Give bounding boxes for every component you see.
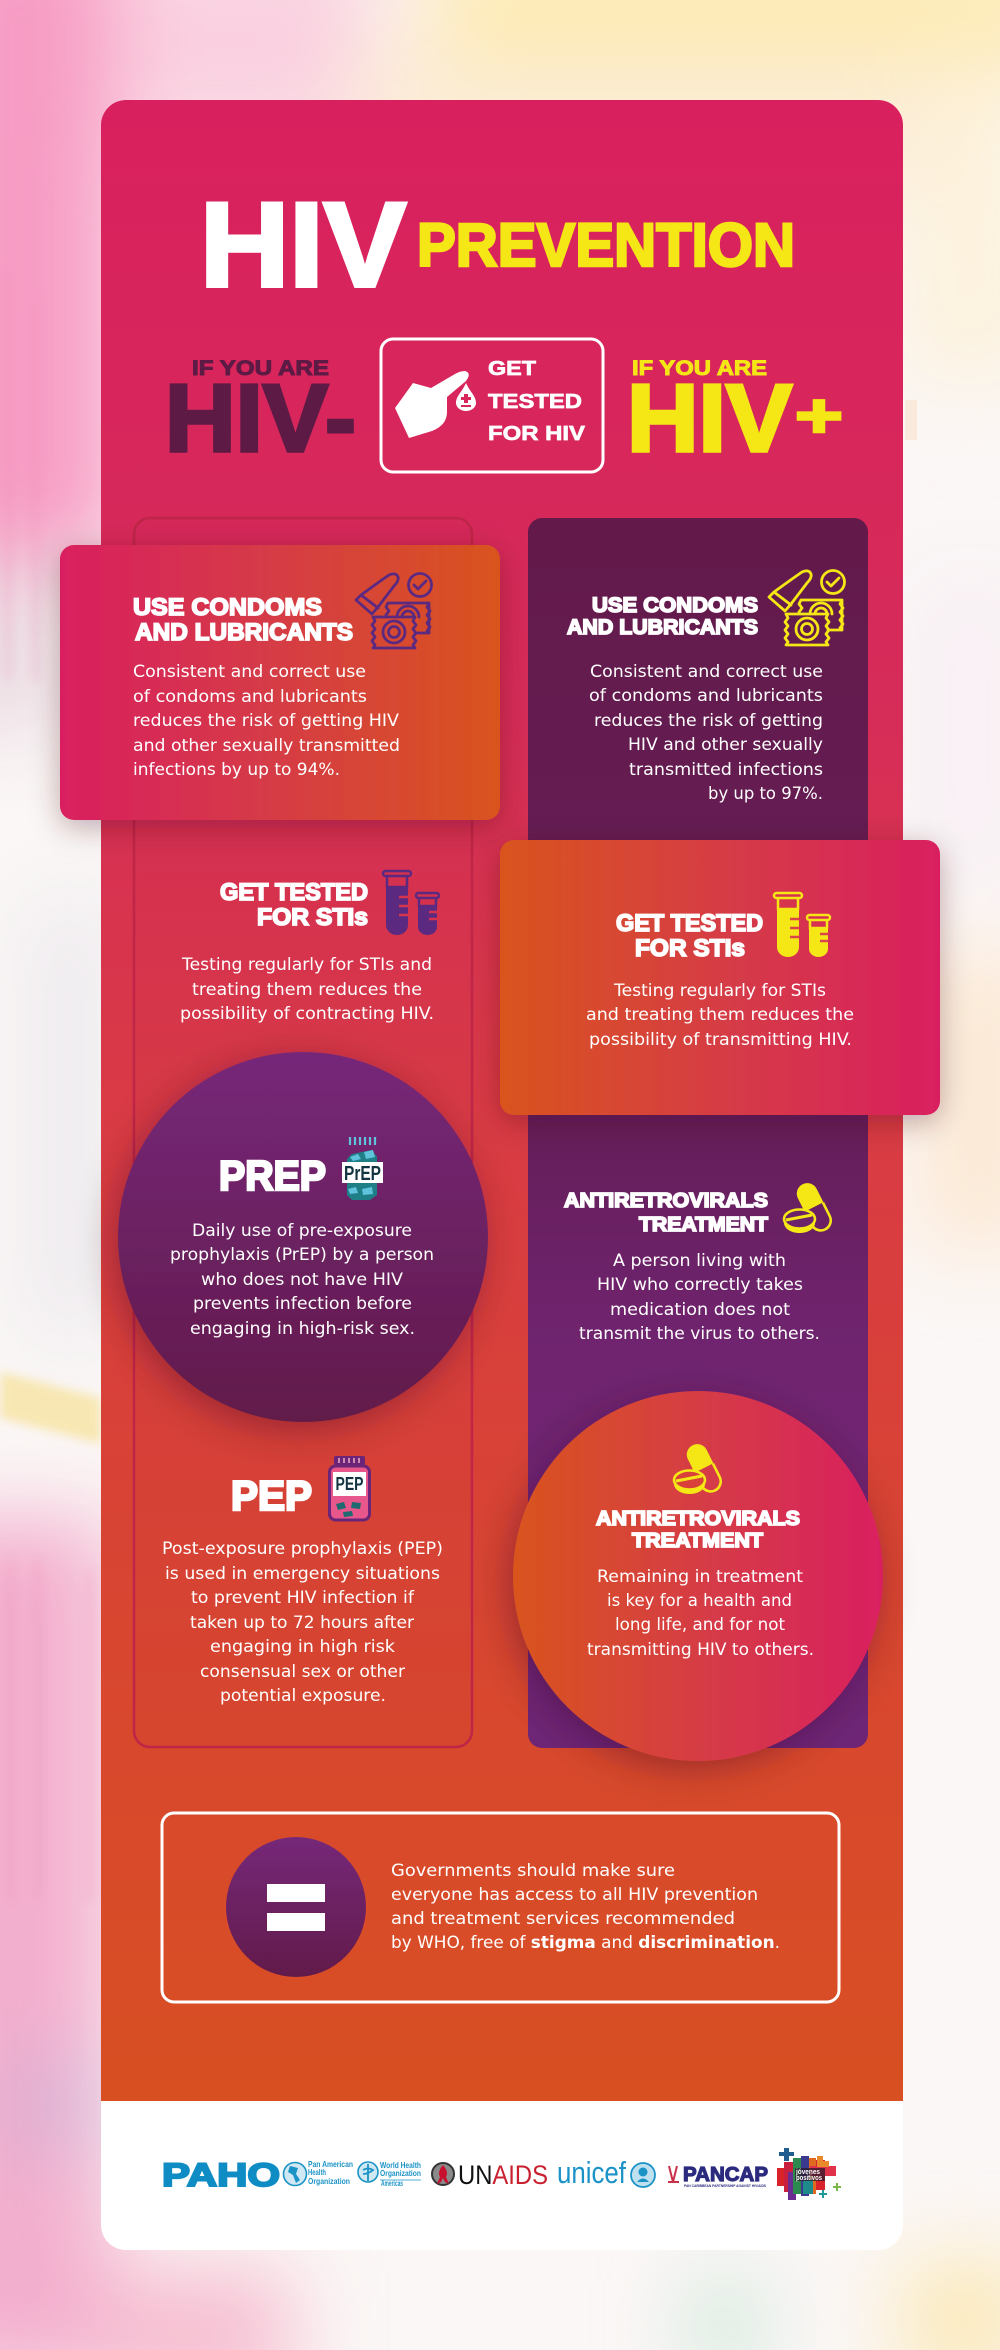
logo: Jovenes Positivos: positivos (796, 2175, 822, 2182)
panel: PEP: engaging in high risk (210, 1637, 395, 1656)
panel: PEP: to prevent HIV infection if (191, 1588, 415, 1607)
logo: PAHO: PAHO (162, 2157, 280, 2193)
panel: antiretrovirals circle: long life, and for not (615, 1615, 786, 1634)
panel: negative, use condoms: infections by up to 94%. (133, 760, 340, 779)
panel: positive, use condoms (567, 570, 844, 803)
logo: WHO: Organization (380, 2168, 421, 2178)
logo: PANCAP: PANCAP (683, 2164, 768, 2186)
panel: negative, use condoms: Consistent and correct use (133, 662, 366, 681)
get tested box: TESTED (488, 391, 582, 413)
heading: if you are HIV negative: - (323, 348, 358, 485)
panel: antiretrovirals circle: TREATMENT (632, 1529, 763, 1552)
callout: governments: everyone has access to all HIV prevention (391, 1885, 758, 1904)
heading: if you are HIV positive: HIV (627, 365, 792, 472)
panel: negative, use condoms: reduces the risk of getting HIV (133, 711, 400, 730)
callout: governments: Governments should make sure (391, 1861, 675, 1880)
callout: governments: by WHO, free of stigma and discrimination. (391, 1933, 780, 1952)
logo: PAHO (162, 2157, 353, 2193)
panel: antiretrovirals circle: is key for a health and (607, 1591, 792, 1610)
panel: positive, use condoms: of condoms and lubricants (589, 686, 823, 705)
logo: WHO (358, 2160, 421, 2188)
panel: positive, use condoms: by up to 97%. (708, 784, 823, 803)
callout: governments (162, 1813, 839, 2002)
logo: PAHO: Organization (308, 2176, 350, 2186)
icon: PEP bottle: PEP (336, 1474, 364, 1494)
heading: if you are HIV negative: HIV (165, 365, 328, 472)
panel: PrEP circle: Daily use of pre-exposure (192, 1221, 412, 1240)
panel: positive, antiretrovirals (564, 1179, 835, 1343)
icon: hand and blood drop (395, 371, 476, 438)
panel: HIV negative column outline (134, 518, 472, 1747)
panel: positive, use condoms: AND LUBRICANTS (567, 616, 758, 639)
panel: PEP: consensual sex or other (200, 1662, 405, 1681)
panel: positive, antiretrovirals: A person living with (613, 1251, 786, 1270)
panel: antiretrovirals circle: ANTIRETROVIRALS (596, 1507, 800, 1530)
panel: positive, use condoms: Consistent and correct use (590, 662, 823, 681)
icon: pills on purple (784, 1179, 835, 1234)
heading: if you are HIV negative: IF YOU ARE (192, 356, 329, 380)
panel: PrEP circle: PREP (219, 1152, 326, 1199)
icon: test tubes yellow (774, 893, 830, 957)
panel: negative, get tested: GET TESTED (220, 879, 368, 906)
logo: PAHO: Pan American (308, 2159, 353, 2169)
get tested box: GET (488, 358, 536, 380)
panel: negative, get tested: FOR STIs (257, 904, 368, 931)
icon: PrEP bottle: PrEP (344, 1163, 381, 1185)
panel: antiretrovirals circle: transmitting HIV to others. (587, 1640, 814, 1659)
get tested box (381, 339, 603, 472)
panel: negative, get tested (180, 871, 439, 1023)
logo: WHO: Americas (381, 2178, 403, 2188)
panel: negative, use condoms: AND LUBRICANTS (135, 619, 353, 646)
panel: positive, antiretrovirals: ANTIRETROVIRALS (564, 1189, 768, 1212)
heading: if you are HIV positive: IF YOU ARE (632, 356, 767, 380)
panel: positive, get tested: and treating them reduces the (586, 1005, 854, 1024)
panel: positive, use condoms: USE CONDOMS (592, 594, 758, 617)
panel: positive, get tested: Testing regularly for STIs (613, 981, 826, 1000)
icon: equals sign circle (226, 1837, 366, 1977)
icon: pills on orange (674, 1440, 725, 1495)
panel: negative, get tested: Testing regularly for STIs and (181, 955, 432, 974)
panel: PEP: PEP (231, 1472, 312, 1519)
panel: PEP: Post-exposure prophylaxis (PEP) (162, 1539, 443, 1558)
panel: positive, use condoms: HIV and other sexually (628, 735, 823, 754)
title (200, 178, 795, 312)
panel: positive, antiretrovirals: HIV who correctly takes (597, 1275, 803, 1294)
panel: PEP: is used in emergency situations (165, 1564, 440, 1583)
panel: PEP: taken up to 72 hours after (190, 1613, 414, 1632)
panel: negative, use condoms: and other sexually transmitted (133, 736, 400, 755)
logo: PAHO: Health (308, 2167, 326, 2177)
panel: negative, use condoms (60, 545, 500, 820)
heading: if you are HIV negative (165, 348, 358, 485)
panel: positive, antiretrovirals: medication does not (610, 1300, 791, 1319)
title: HIV (200, 178, 406, 312)
panel: negative, use condoms: of condoms and lubricants (133, 687, 367, 706)
logo: UNAIDS: UNAIDS (458, 2160, 548, 2190)
footer logos (162, 2148, 841, 2200)
panel: PrEP circle: engaging in high-risk sex. (190, 1319, 415, 1338)
panel: positive, use condoms: transmitted infections (629, 760, 823, 779)
panel: PrEP circle: prophylaxis (PrEP) by a person (170, 1245, 434, 1264)
panel: PEP: potential exposure. (220, 1686, 386, 1705)
panel: HIV positive column (528, 518, 868, 1748)
logo: PANCAP: PAN CARIBBEAN PARTNERSHIP AGAINST HIV/AIDS (684, 2184, 767, 2188)
callout: governments: and treatment services recommended (391, 1909, 735, 1928)
icon: PrEP bottle (342, 1137, 383, 1200)
panel: negative, get tested: treating them reduces the (192, 980, 422, 999)
panel: positive, get tested: FOR STIs (635, 935, 745, 962)
logo: Jovenes Positivos (777, 2148, 841, 2200)
panel: negative, use condoms: USE CONDOMS (133, 594, 322, 621)
panel: PrEP circle (118, 1052, 488, 1422)
panel: positive, get tested (500, 840, 940, 1115)
icon: PEP bottle (330, 1456, 370, 1520)
panel: positive, get tested: GET TESTED (616, 910, 763, 937)
panel: positive, antiretrovirals: TREATMENT (639, 1213, 768, 1236)
panel: PEP (162, 1456, 443, 1705)
panel: antiretrovirals circle: Remaining in treatment (597, 1567, 804, 1586)
title: PREVENTION (417, 211, 795, 279)
logo: WHO: World Health (380, 2160, 421, 2170)
logo: Jovenes Positivos: jóvenes (795, 2169, 820, 2176)
panel: PrEP circle: prevents infection before (193, 1294, 412, 1313)
panel: negative, get tested: possibility of contracting HIV. (180, 1004, 434, 1023)
panel: positive, get tested: possibility of transmitting HIV. (589, 1030, 852, 1049)
logo: unicef: unicef (557, 2155, 626, 2190)
heading: if you are HIV positive: + (795, 382, 843, 451)
icon: condom packets (356, 574, 432, 648)
panel: antiretrovirals circle (513, 1391, 883, 1761)
panel: PrEP circle: who does not have HIV (201, 1270, 404, 1289)
main card (101, 100, 903, 2250)
heading: if you are HIV positive (627, 356, 843, 472)
panel: positive, antiretrovirals: transmit the virus to others. (579, 1324, 820, 1343)
panel: positive, use condoms: reduces the risk of getting (594, 711, 823, 730)
icon: condom packets yellow (769, 570, 844, 645)
icon: test tubes purple (383, 871, 439, 935)
get tested box: FOR HIV (488, 423, 586, 445)
